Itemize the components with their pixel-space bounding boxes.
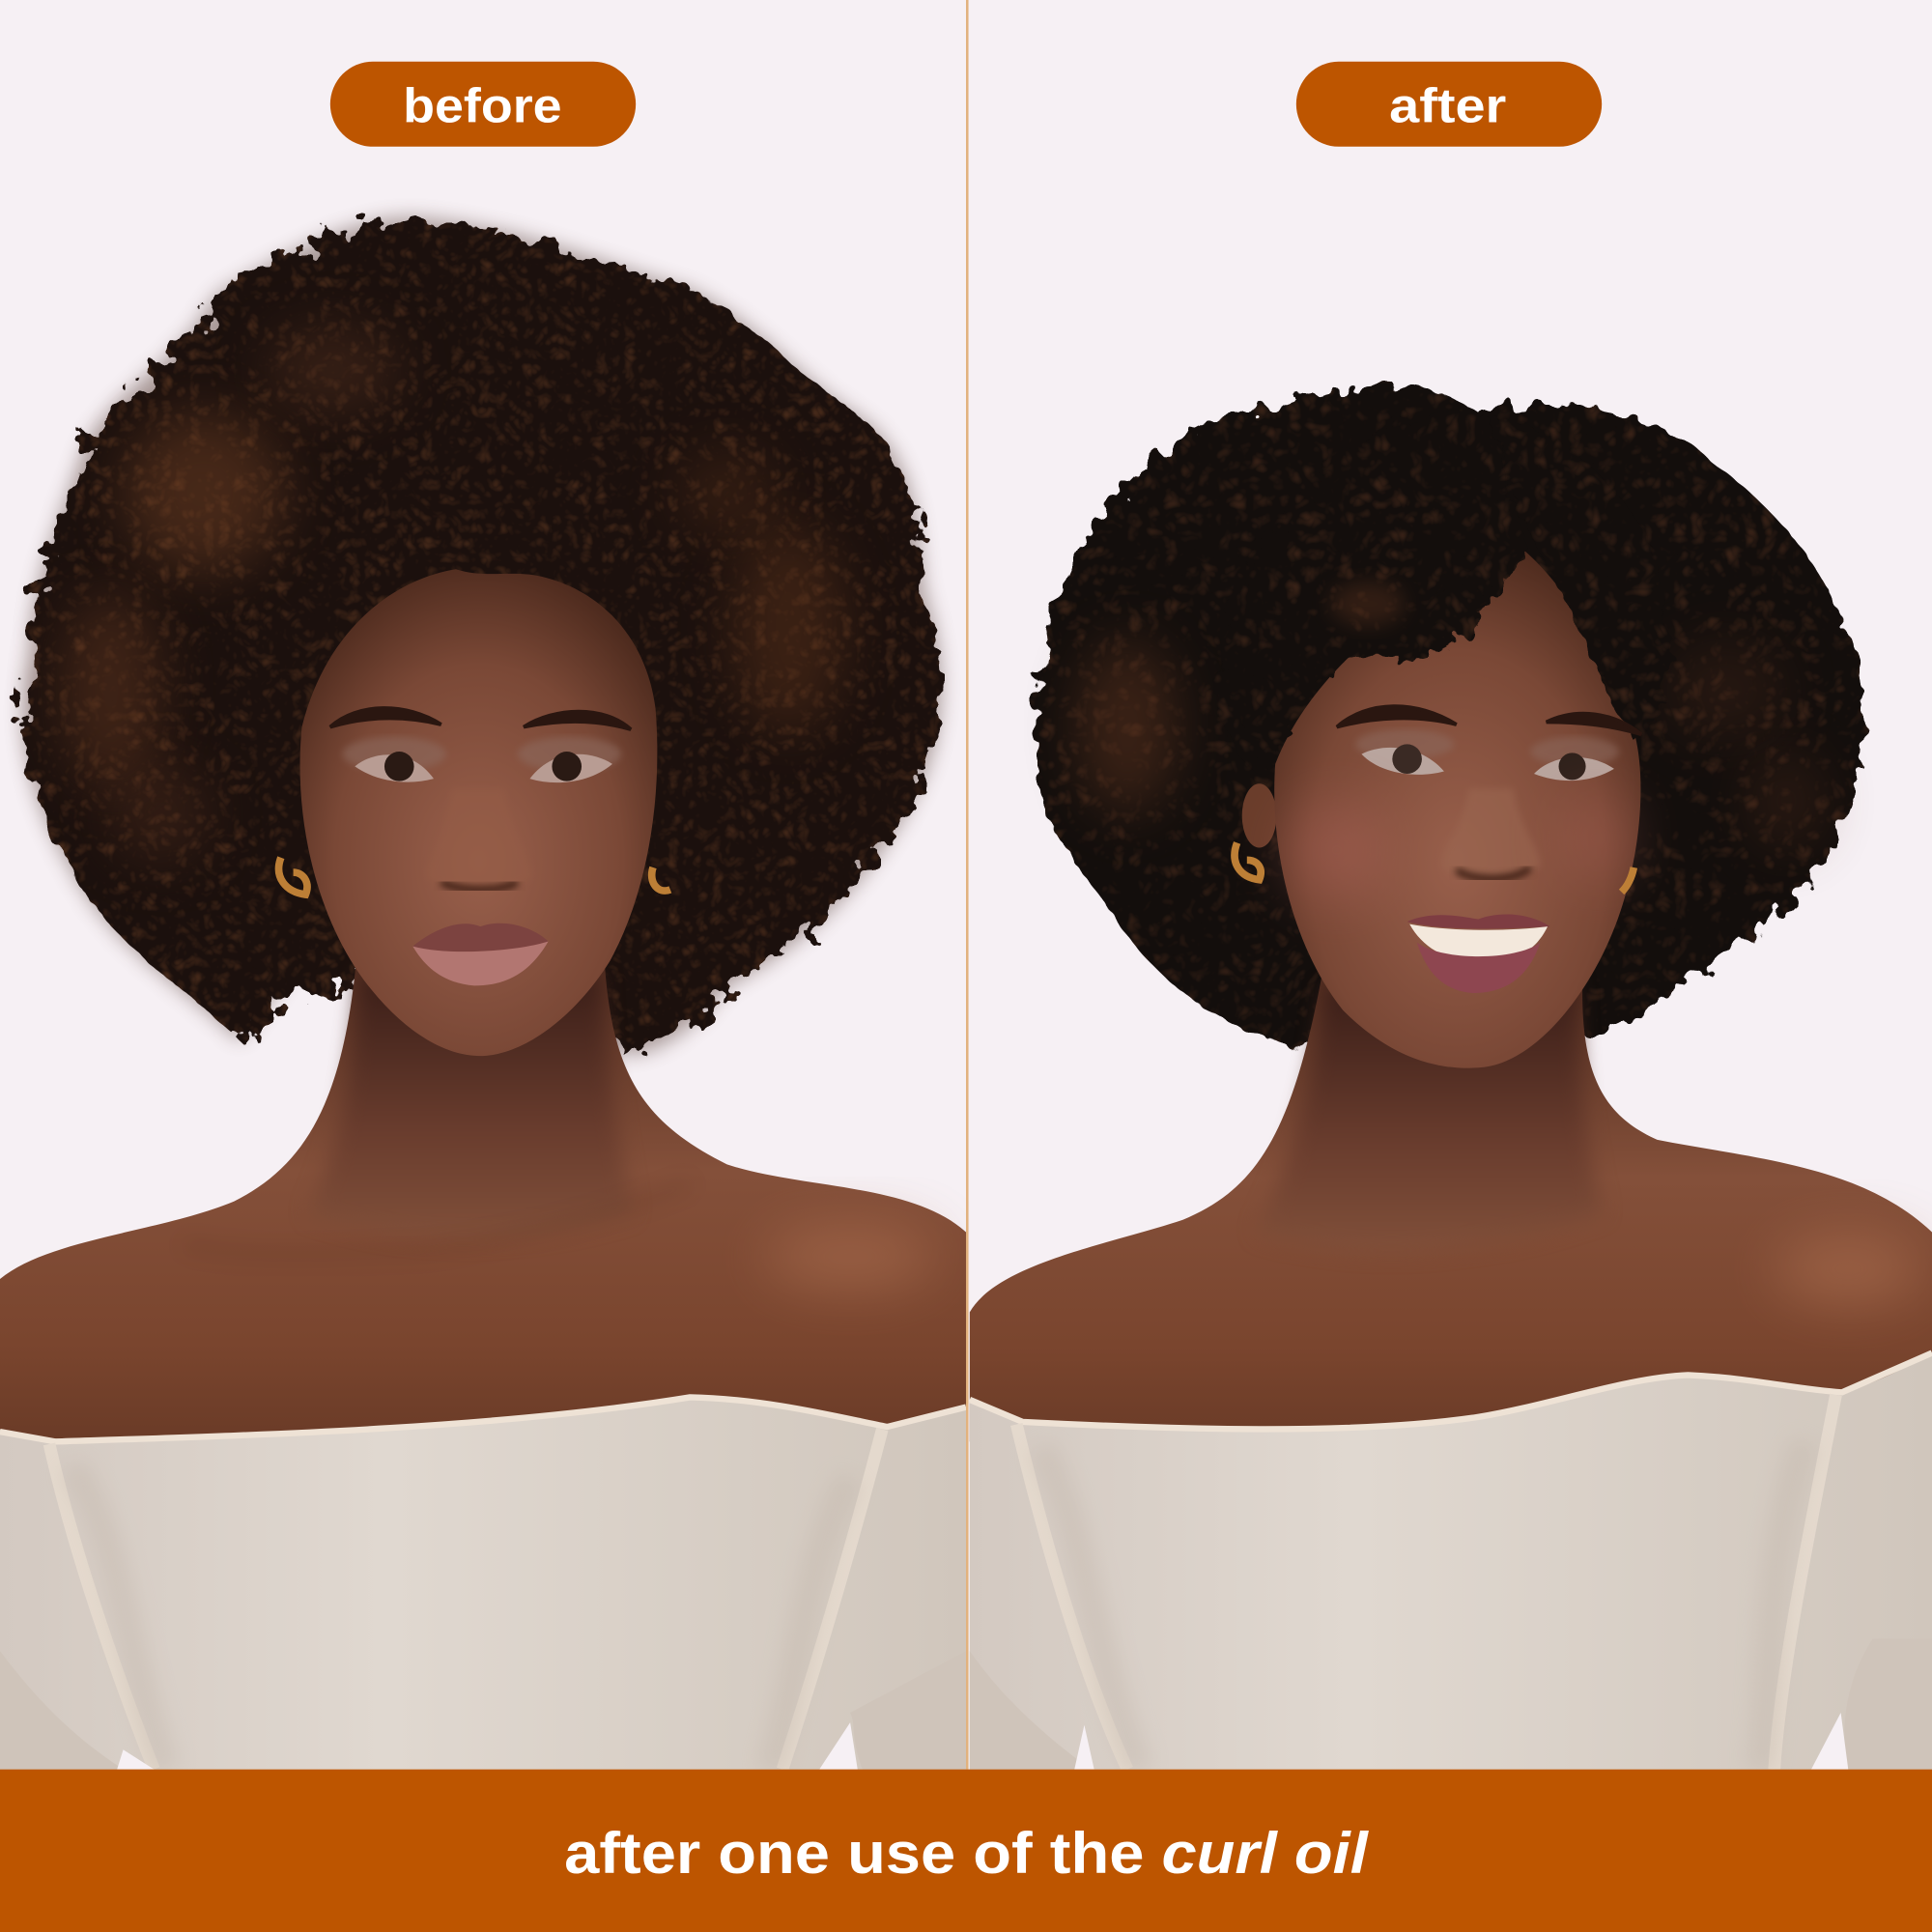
pill: before xyxy=(330,62,636,147)
before: hair xyxy=(23,217,941,1054)
panel: before xyxy=(0,217,966,1770)
before: face xyxy=(300,569,657,1056)
footer banner xyxy=(0,1770,1932,1932)
pill: after: after xyxy=(1389,78,1506,132)
before: garment xyxy=(0,1397,966,1770)
before: collarbone shadow xyxy=(185,1182,690,1255)
after: hair xyxy=(1035,384,1863,1047)
after: face xyxy=(1274,549,1640,1068)
after: shoulder highlight xyxy=(1775,1235,1922,1303)
after: facial features xyxy=(1288,706,1641,993)
after: ear xyxy=(1242,783,1276,848)
before: shoulders and neck xyxy=(0,949,966,1441)
before: neck shadow xyxy=(308,974,631,1238)
after: shoulders and neck xyxy=(970,961,1932,1441)
before: earrings xyxy=(279,858,670,895)
divider xyxy=(966,0,969,1770)
before: facial features xyxy=(330,708,631,985)
after: neck shadow xyxy=(1257,985,1602,1251)
after: earrings xyxy=(1235,842,1634,892)
after: panel background xyxy=(970,0,1932,1770)
pill: after xyxy=(1296,62,1602,147)
after: garment xyxy=(970,1353,1932,1770)
after: fringe highlights xyxy=(1331,582,1405,626)
after: right hair fringe xyxy=(1491,419,1669,739)
before: frizz halo xyxy=(23,217,941,1054)
panel: after xyxy=(970,0,1932,1770)
after: left hair fringe xyxy=(1213,413,1528,771)
footer banner: after one use of the curl oil xyxy=(564,1821,1369,1886)
before: shoulder highlight xyxy=(764,1226,936,1288)
pill: before: before xyxy=(403,78,562,132)
